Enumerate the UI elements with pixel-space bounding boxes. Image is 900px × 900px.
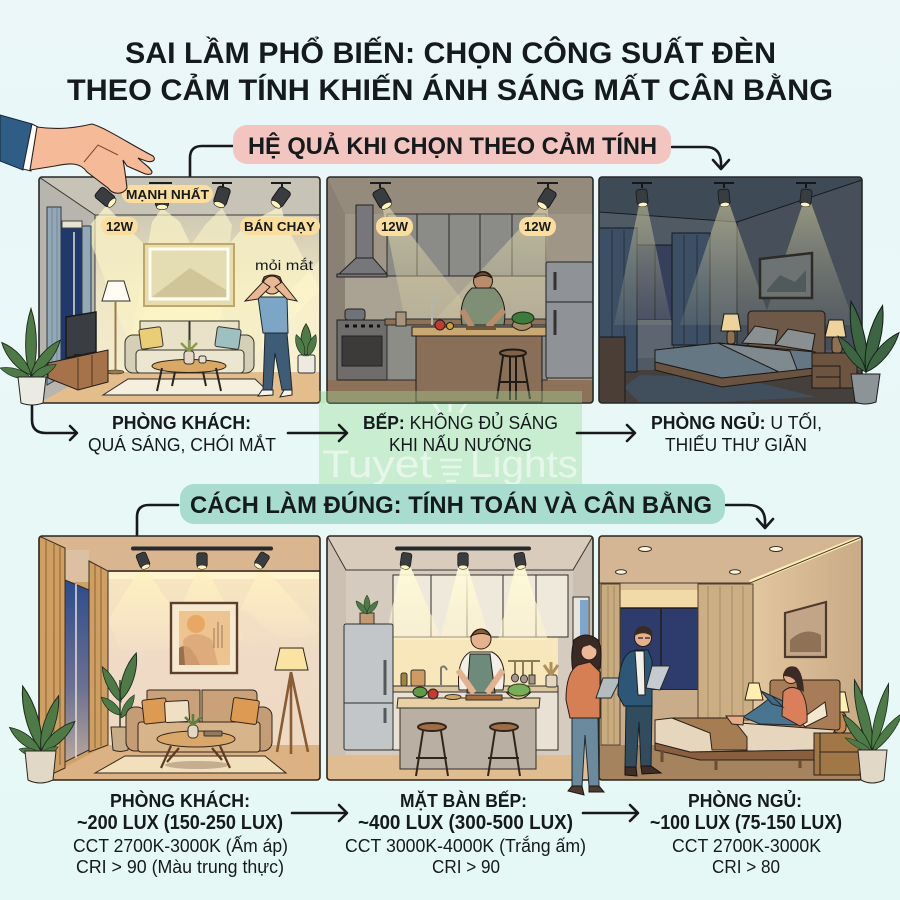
framed art	[171, 603, 237, 673]
plant: right bottom	[839, 679, 900, 783]
connector arrow: second heading to panels	[137, 505, 773, 535]
caption: living room: QUÁ SÁNG, CHÓI MẮT	[88, 434, 276, 455]
heading pill: correct approach: CÁCH LÀM ĐÚNG: TÍNH TOÁN VÀ CÂN BẰNG	[190, 491, 712, 519]
caption: living room: PHÒNG KHÁCH:	[112, 412, 251, 433]
caption: living room target: PHÒNG KHÁCH:	[110, 790, 250, 811]
plant: left top	[0, 308, 64, 405]
track light	[395, 546, 531, 570]
watermark: Tuyet Lights: Lights	[470, 444, 578, 486]
fridge	[546, 262, 593, 378]
floor lamp	[102, 281, 130, 374]
sofa	[125, 321, 254, 373]
caption: bedroom target: CRI > 80	[712, 857, 780, 877]
label: 12W right	[519, 217, 556, 236]
kitchen island	[412, 312, 546, 402]
arrow: kitchen to bedroom target	[583, 805, 638, 821]
caption: living room target: ~200 LUX (150-250 LUX)	[77, 812, 283, 834]
fridge	[344, 624, 393, 750]
caption: kitchen target: ~400 LUX (300-500 LUX)	[358, 812, 573, 834]
caption: kitchen	[363, 412, 558, 455]
caption: kitchen target: CCT 3000K-4000K (Trắng ấm)	[345, 835, 586, 856]
watermark: Tuyet Lights	[319, 392, 582, 512]
bedside lamps	[721, 314, 846, 353]
island with food	[397, 684, 540, 769]
tripod floor lamp	[275, 648, 308, 754]
counter and utensils	[393, 661, 558, 750]
label: 12W left: 12W	[381, 219, 409, 234]
track light	[131, 546, 273, 571]
label: 12W	[101, 217, 138, 235]
range hood	[337, 205, 387, 277]
spotlights	[370, 183, 558, 211]
caption: bedroom target: ~100 LUX (75-150 LUX)	[650, 812, 842, 834]
rug and coffee table	[103, 340, 272, 395]
cabinets	[387, 214, 546, 276]
rug and table	[95, 714, 286, 773]
panel: living room too bright	[39, 177, 320, 403]
plant small	[295, 323, 317, 374]
caption: kitchen: KHI NẤU NƯỚNG	[389, 434, 532, 455]
arrow: panel to living room caption	[32, 406, 77, 440]
recessed lights	[616, 546, 782, 574]
panel: kitchen not enough light	[327, 177, 593, 403]
panel: balanced bedroom	[599, 536, 862, 780]
caption: living room target: CRI > 90 (Màu trung thực)	[76, 857, 284, 877]
caption: bedroom: PHÒNG NGỦ: U TỐI,	[651, 412, 822, 433]
caption: living room	[88, 412, 276, 455]
title: THEO CẢM TÍNH KHIẾN ÁNH SÁNG MẤT CÂN BẰNG	[67, 73, 833, 107]
picture frame	[144, 244, 234, 306]
heading pill: consequences: HỆ QUẢ KHI CHỌN THEO CẢM TÍNH	[248, 131, 657, 160]
beams	[385, 568, 548, 640]
plant: left bottom	[6, 684, 79, 783]
watermark: Tuyet Lights: Tuyet	[322, 444, 433, 486]
caption: living room target: CCT 2700K-3000K (Ấm áp)	[73, 835, 288, 856]
connector arrow: top heading to panels	[190, 146, 729, 176]
wall glare beams	[90, 206, 319, 349]
label: 12W left	[376, 217, 413, 236]
label: 12W right: 12W	[524, 219, 552, 234]
bed	[655, 311, 825, 387]
caption: kitchen: BẾP: KHÔNG ĐỦ SÁNG	[363, 412, 558, 433]
beams	[614, 200, 855, 325]
man rubbing eyes	[245, 275, 297, 397]
window and curtains	[39, 536, 108, 780]
bed with reader	[655, 666, 840, 770]
stools	[416, 723, 520, 776]
arrow: living room to kitchen	[288, 425, 347, 441]
label: 12W: 12W	[106, 219, 134, 234]
cabinets	[393, 575, 568, 637]
light beams	[383, 208, 548, 318]
wall picture	[760, 253, 812, 298]
nightstand	[812, 353, 857, 388]
icon: hand adjusting spotlight	[0, 115, 154, 193]
plant: right top	[834, 300, 900, 404]
spotlights	[94, 183, 291, 210]
spotlights	[632, 183, 816, 207]
cook in apron	[458, 629, 504, 693]
caption: bedroom	[651, 412, 822, 455]
title	[67, 36, 833, 107]
caption: bedroom target	[650, 790, 842, 877]
panel: bedroom too dark	[599, 177, 862, 403]
nightstand	[814, 733, 860, 775]
window	[573, 597, 589, 693]
sofa	[126, 690, 272, 752]
stove and counter	[337, 298, 548, 380]
cook	[461, 272, 505, 327]
label: tired eyes: mỏi mắt	[255, 257, 313, 273]
soft beams	[123, 572, 284, 596]
person: woman with tablet	[566, 635, 621, 795]
heading pill: correct approach	[180, 484, 725, 524]
arrow: kitchen to bedroom	[577, 425, 635, 441]
watermark tint over kitchen floor	[319, 391, 582, 403]
title: SAI LẦM PHỔ BIẾN: CHỌN CÔNG SUẤT ĐÈN	[125, 36, 776, 70]
lamps	[745, 683, 849, 733]
label: best seller: BÁN CHẠY	[244, 219, 315, 234]
caption: bedroom target: CCT 2700K-3000K	[672, 836, 821, 856]
caption: bedroom: THIẾU THƯ GIÃN	[665, 434, 807, 455]
wall art	[785, 602, 826, 657]
plant on fridge	[356, 595, 378, 624]
person: man with tablet	[618, 626, 670, 776]
rear plant	[100, 652, 138, 752]
arrow: living room to kitchen target	[292, 805, 347, 821]
caption: kitchen target: MẶT BÀN BẾP:	[400, 790, 527, 811]
window and curtains	[601, 584, 753, 745]
panel: balanced kitchen	[327, 536, 593, 780]
stool	[497, 350, 530, 400]
window and curtains	[599, 228, 710, 403]
label: strongest: MẠNH NHẤT	[126, 187, 209, 202]
caption: living room target	[73, 790, 288, 877]
caption: kitchen target	[345, 790, 586, 877]
tv console	[48, 312, 108, 390]
heading pill: consequences	[233, 125, 671, 164]
caption: bedroom target: PHÒNG NGỦ:	[688, 790, 802, 811]
curtains and window	[47, 207, 91, 385]
panel: balanced living room	[39, 536, 320, 780]
caption: kitchen target: CRI > 90	[432, 857, 500, 877]
